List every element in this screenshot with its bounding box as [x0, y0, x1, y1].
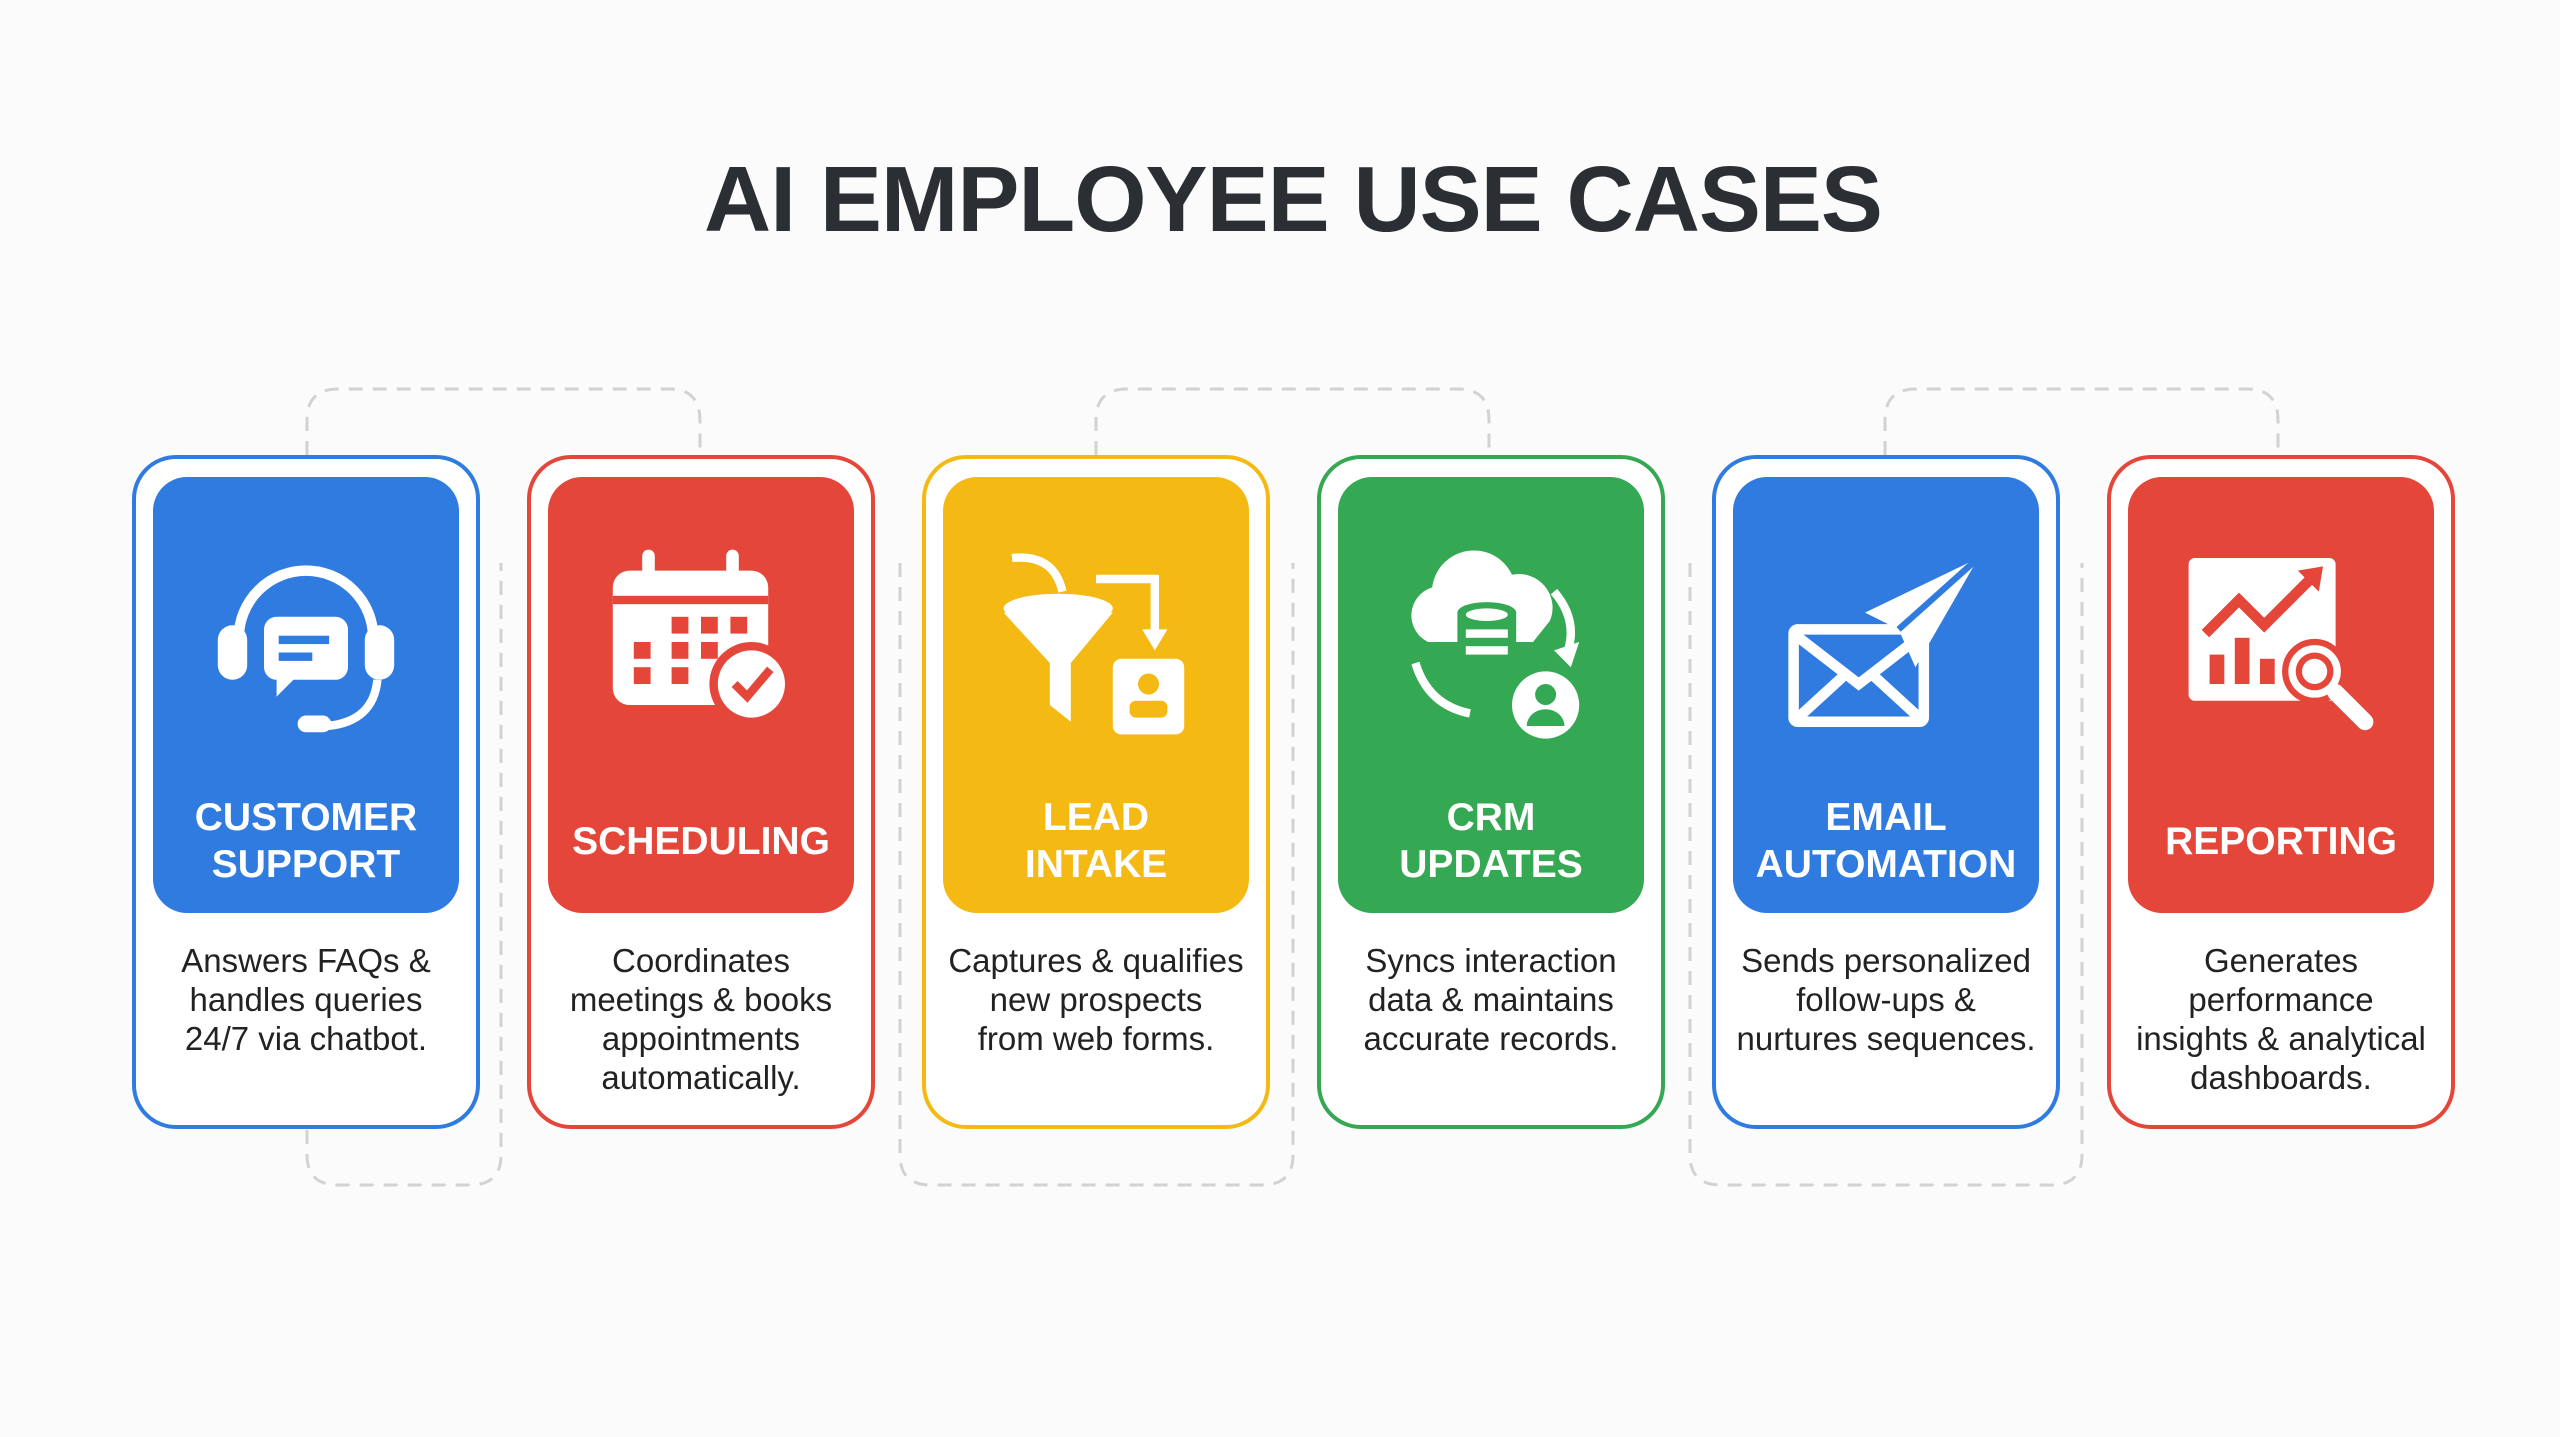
header: scheduling [548, 477, 854, 913]
header: lead intake [943, 477, 1249, 913]
description [1736, 942, 2036, 1057]
description: 24/7 via chatbot. [185, 1020, 427, 1057]
label: SCHEDULING [572, 820, 830, 862]
description: Coordinates [612, 942, 790, 979]
label: CRM [1447, 796, 1535, 839]
description: dashboards. [2190, 1059, 2372, 1096]
description: Sends personalized [1741, 942, 2031, 979]
label: EMAIL [1825, 796, 1947, 839]
description [2136, 942, 2426, 1096]
icon: cloud database sync [1411, 550, 1580, 739]
header: crm updates [1338, 477, 1644, 913]
header: reporting [2128, 477, 2434, 913]
title: AI EMPLOYEE USE CASES [704, 147, 1882, 251]
icon: chart with magnifier [2188, 558, 2374, 730]
description: performance [2188, 981, 2374, 1018]
header: email automation [1733, 477, 2039, 913]
description: nurtures sequences. [1736, 1020, 2036, 1057]
description [570, 942, 832, 1096]
panel: reporting [2107, 455, 2455, 1129]
description: insights & analytical [2136, 1020, 2426, 1057]
label [1399, 796, 1583, 886]
description [181, 942, 431, 1057]
label [1025, 796, 1167, 886]
label: REPORTING [2165, 820, 2397, 862]
panel: scheduling [527, 455, 875, 1129]
description: data & maintains [1368, 981, 1614, 1018]
panel: email automation [1712, 455, 2060, 1129]
description: handles queries [190, 981, 422, 1018]
description: Generates [2204, 942, 2358, 979]
label: INTAKE [1025, 843, 1167, 886]
label: SUPPORT [212, 843, 400, 886]
panel: lead intake [922, 455, 1270, 1129]
description: meetings & books [570, 981, 832, 1018]
label: CUSTOMER [195, 796, 417, 839]
description: Captures & qualifies [948, 942, 1244, 979]
panel: crm updates [1317, 455, 1665, 1129]
icon: headset chat [218, 565, 394, 732]
label: AUTOMATION [1756, 843, 2016, 886]
description: appointments [602, 1020, 800, 1057]
label [1756, 796, 2016, 886]
description: new prospects [990, 981, 1202, 1018]
panel: customer support [132, 455, 480, 1129]
label: UPDATES [1399, 843, 1583, 886]
description: accurate records. [1364, 1020, 1618, 1057]
description: follow-ups & [1796, 981, 1976, 1018]
description: automatically. [601, 1059, 801, 1096]
description: Answers FAQs & [181, 942, 431, 979]
icon: calendar check [612, 550, 785, 718]
description: from web forms. [978, 1020, 1214, 1057]
icon: envelope and paper plane [1788, 562, 1974, 727]
description [948, 942, 1244, 1057]
header: customer support [153, 477, 459, 913]
label [195, 796, 417, 886]
description [1364, 942, 1618, 1057]
icon: funnel and contact [1004, 553, 1184, 734]
label: LEAD [1043, 796, 1149, 839]
description: Syncs interaction [1365, 942, 1617, 979]
